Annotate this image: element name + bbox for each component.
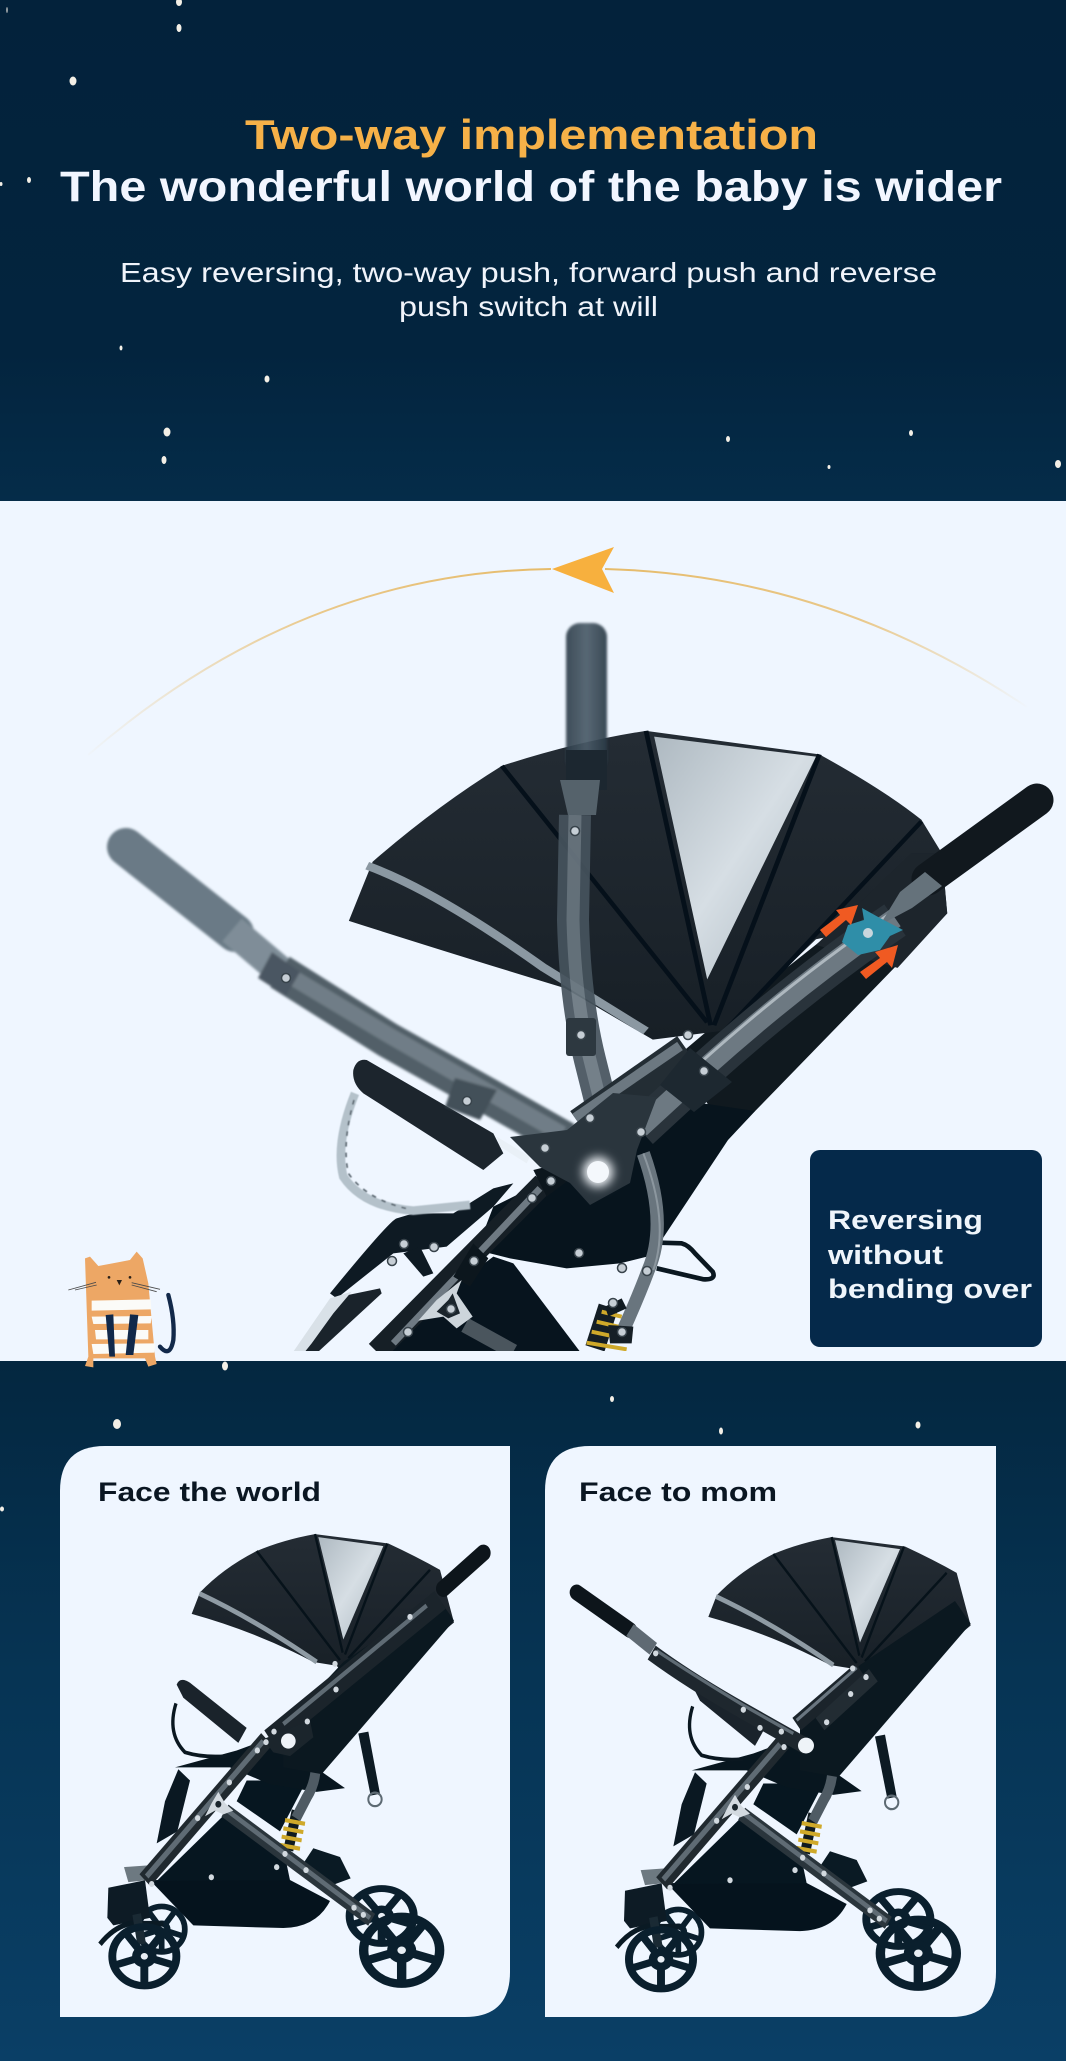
- icon: teal release button: [842, 908, 903, 955]
- callout: reversing without bending over: without: [827, 1240, 943, 1270]
- heading: wonderful world: The wonderful world of the baby is wider: [60, 163, 1002, 211]
- heading: face the world: Face the world: [98, 1477, 321, 1507]
- stars: [0, 0, 1061, 469]
- text block: description: [120, 257, 937, 322]
- panel: top starry header: [0, 0, 1066, 501]
- bolts: [282, 826, 708, 1336]
- heading: two-way implementation: Two-way implementation: [245, 111, 818, 158]
- stroller lower frame, armrest and footrest: [293, 1060, 755, 1352]
- ghost handle: upright position: [560, 623, 607, 1120]
- panel: face the world: [60, 1446, 510, 2017]
- main stroller photo illustration: [126, 623, 1037, 1352]
- stroller: forward facing: [100, 1534, 483, 1986]
- panel: bottom starry background: [0, 1361, 1066, 2061]
- arrow: orange upper: [820, 905, 858, 937]
- stroller canopy and seat back: [349, 731, 947, 1140]
- callout: reversing without bending over: bending over: [828, 1274, 1033, 1304]
- callout: reversing without bending over: [810, 1150, 1042, 1347]
- stars: [0, 1362, 920, 1512]
- text block: description: Easy reversing, two-way push, forward push and reverse: [120, 257, 937, 288]
- panel: light reversing demonstration: [0, 501, 1066, 1361]
- ghost handle: left position: [126, 847, 566, 1140]
- callout: reversing without bending over: Reversing: [828, 1205, 983, 1235]
- arrow: reversing arc: [88, 547, 1027, 755]
- panel: face to mom: [545, 1446, 996, 2017]
- icon: striped cat mascot: [68, 1252, 174, 1367]
- hub: [510, 1093, 657, 1205]
- text block: description: push switch at will: [399, 291, 658, 322]
- arrow: orange lower: [860, 945, 898, 979]
- main handle and frame rails: [282, 800, 1037, 1336]
- stroller: parent facing: [577, 1537, 971, 1989]
- armrest strap: [341, 1093, 470, 1211]
- heading: face to mom: Face to mom: [579, 1477, 777, 1507]
